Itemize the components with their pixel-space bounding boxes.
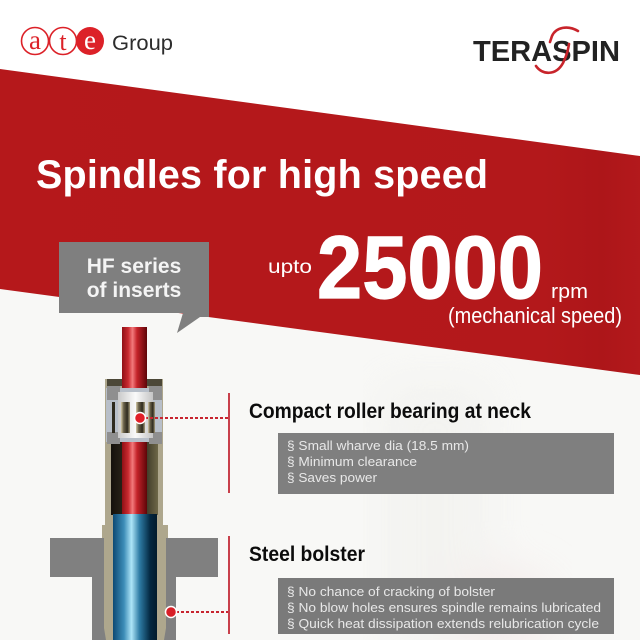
blue shaft	[113, 514, 157, 640]
red shaft	[122, 327, 147, 514]
callout: HF series of inserts	[59, 242, 209, 333]
callout: HF series of inserts: of inserts	[87, 279, 181, 302]
logo circles: a	[29, 25, 41, 55]
vertical rule: bolster	[228, 536, 230, 634]
top bearing cap	[107, 379, 162, 386]
upto: upto	[268, 257, 312, 278]
white header area above red band	[0, 0, 640, 156]
panel: bolster features: § No blow holes ensures spindle remains lubricated	[287, 600, 601, 615]
logo: TeraSpin	[473, 28, 620, 73]
panel: bearing features	[278, 433, 614, 494]
logo: ate Group	[22, 25, 173, 56]
heading: compact roller bearing: Compact roller bearing at neck	[249, 400, 531, 423]
marker: bearing leader	[134, 412, 229, 424]
spindle diagram	[50, 327, 218, 640]
logo word: Group: Group	[112, 32, 173, 55]
swirl	[536, 28, 578, 73]
logo circles: t	[59, 27, 67, 56]
panel: bolster features	[278, 578, 614, 634]
dark insert cavity	[111, 440, 158, 515]
panel: bolster features: § Quick heat dissipation extends relubrication cycle	[287, 616, 599, 631]
logo circles	[22, 25, 104, 56]
panel: bearing features: § Saves power	[287, 470, 378, 485]
rollers	[112, 402, 115, 433]
bearing housing	[106, 386, 162, 444]
mechanical speed: (mechanical speed)	[448, 303, 622, 328]
heading: steel bolster: Steel bolster	[249, 543, 365, 566]
red diagonal band	[0, 69, 640, 375]
speed callout	[268, 217, 622, 328]
outer housing	[102, 379, 168, 640]
vertical rule: bearing	[228, 393, 230, 493]
panel: bearing features: § Minimum clearance	[287, 454, 417, 469]
25000: 25000	[317, 217, 543, 317]
rpm: rpm	[551, 281, 588, 303]
marker: bolster leader	[166, 606, 228, 618]
bolster	[50, 538, 218, 640]
faint background shading	[380, 380, 555, 640]
title: Spindles for high speed	[36, 153, 488, 197]
panel: bolster features: § No chance of cracking of bolster	[287, 584, 496, 599]
wordmark: TERASPIN	[473, 36, 620, 68]
bearing cage	[118, 392, 153, 438]
callout: HF series of inserts: HF series	[87, 255, 181, 278]
logo circles: e	[84, 25, 96, 55]
panel: bearing features: § Small wharve dia (18.5 mm)	[287, 438, 469, 453]
